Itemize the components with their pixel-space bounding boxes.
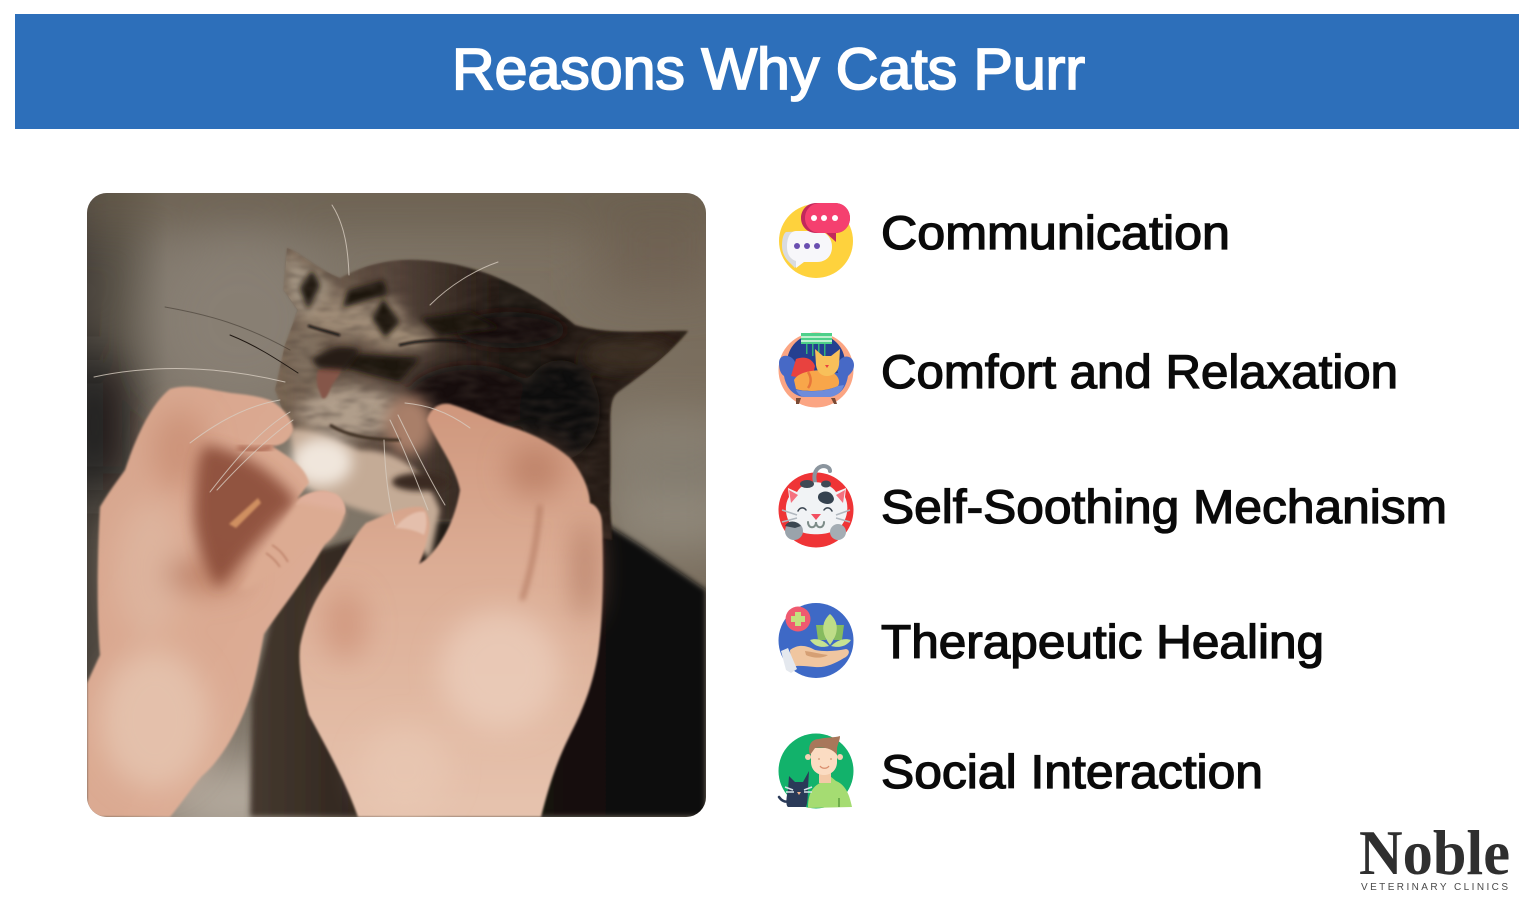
item: Self-Soothing Mechanism bbox=[778, 466, 1447, 548]
cat nose bbox=[316, 367, 342, 400]
item: Social Interaction bbox=[778, 734, 1263, 808]
item: Comfort and Relaxation bbox=[778, 332, 1398, 408]
hand right bbox=[299, 404, 603, 817]
label: Self-Soothing Mechanism bbox=[881, 480, 1447, 533]
title banner bbox=[15, 14, 1519, 129]
icon: speech bubbles bbox=[779, 203, 853, 278]
icon: happy cat bbox=[778, 466, 854, 548]
label: Communication bbox=[881, 206, 1230, 259]
label: Therapeutic Healing bbox=[881, 615, 1324, 668]
title: Reasons Why Cats Purr bbox=[452, 37, 1085, 102]
chin fluff bbox=[289, 429, 440, 560]
cat eyes closed bbox=[309, 326, 466, 345]
item: Communication bbox=[779, 203, 1230, 278]
item: Therapeutic Healing bbox=[778, 603, 1324, 678]
label: Social Interaction bbox=[881, 745, 1263, 798]
whiskers bbox=[94, 205, 498, 525]
logo: Noble Veterinary Clinics: Noble bbox=[1359, 817, 1510, 888]
photo: hands petting a purring tabby cat bbox=[87, 193, 706, 817]
icon: man with cat bbox=[778, 734, 854, 808]
hand left bbox=[87, 387, 345, 817]
cat body bbox=[250, 520, 706, 817]
label: Comfort and Relaxation bbox=[881, 345, 1398, 398]
cat head bbox=[270, 240, 690, 540]
logo: Noble Veterinary Clinics: VETERINARY CLINICS bbox=[1361, 882, 1508, 893]
icon: cat on sofa bbox=[778, 332, 854, 408]
icon: healing hand with leaves bbox=[778, 603, 854, 678]
